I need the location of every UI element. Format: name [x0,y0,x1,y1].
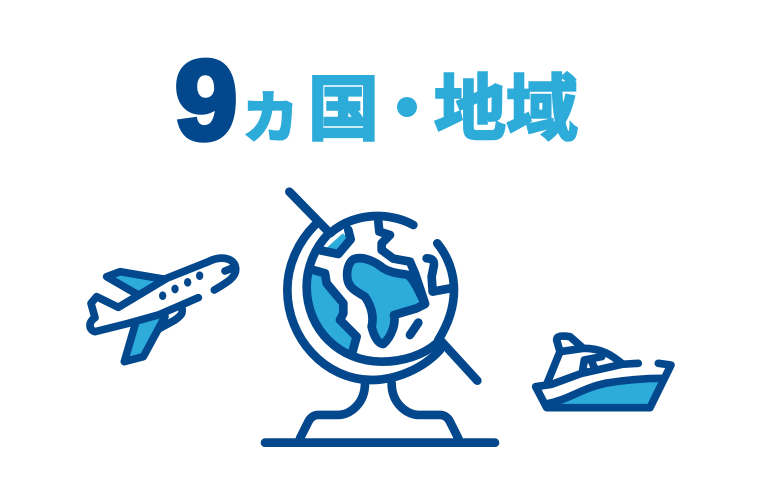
continent [347,258,425,344]
icon: airplane [90,258,236,362]
title: カ [243,87,298,149]
title: 地域 [434,70,578,150]
title: 9 [175,38,237,163]
title [175,38,578,163]
icon: globe [265,192,495,443]
icon: boat [536,336,671,408]
title: 国 [308,71,379,150]
